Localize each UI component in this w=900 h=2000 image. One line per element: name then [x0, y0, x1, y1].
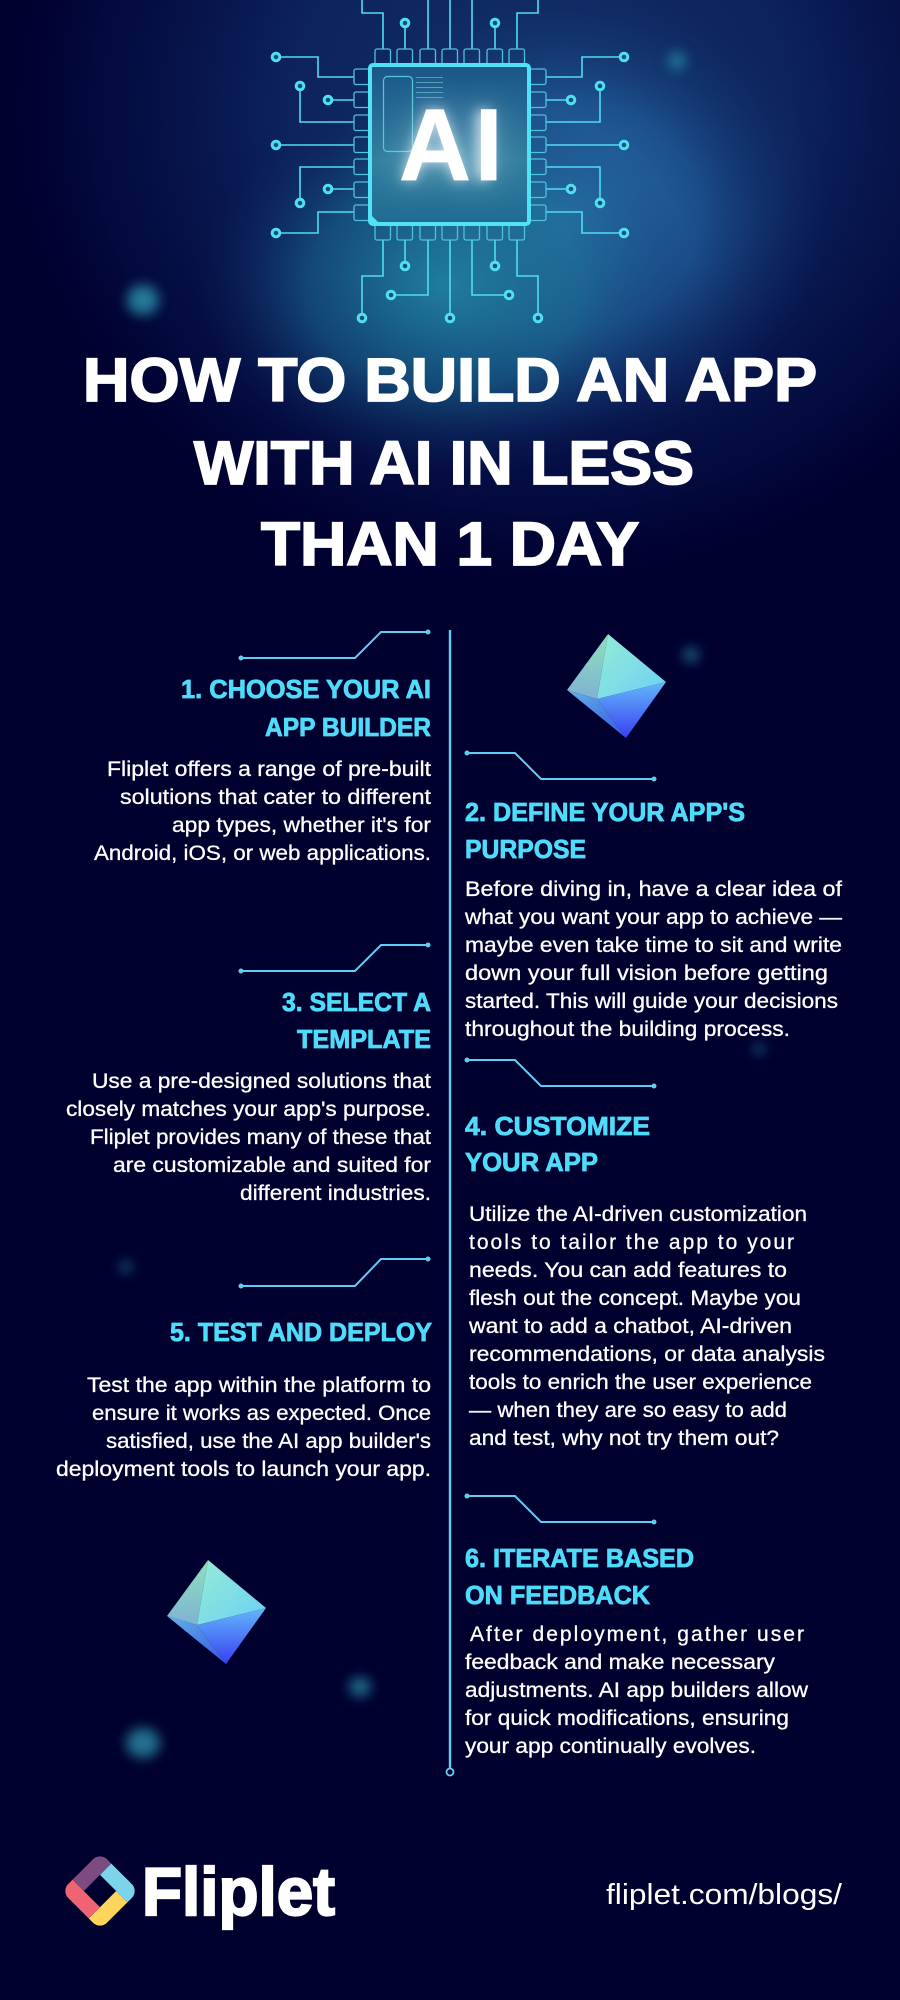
top navy wash [0, 0, 900, 640]
body text [465, 1623, 809, 1758]
connector [238, 1256, 430, 1288]
blurred light spots [120, 52, 765, 1758]
body text: tools to enrich the user experience [469, 1371, 812, 1394]
body text: After deployment, gather user [470, 1623, 804, 1646]
body text [94, 758, 431, 865]
title: WITH AI IN LESS [194, 429, 694, 497]
heading: 5. TEST AND DEPLOY [170, 1317, 432, 1347]
body text [56, 1374, 431, 1481]
body text: and test, why not try them out? [469, 1427, 779, 1450]
body text: ensure it works as expected. Once [92, 1402, 431, 1425]
body text: for quick modifications, ensuring [465, 1707, 789, 1730]
body text: down your full vision before getting [465, 962, 828, 985]
body text: — when they are so easy to add [469, 1399, 787, 1422]
step 4 [464, 1058, 825, 1450]
body text: Test the app within the platform to [87, 1374, 431, 1397]
central timeline [446, 630, 454, 1776]
body text: needs. You can add features to [469, 1259, 787, 1282]
heading [465, 1543, 694, 1610]
heading: ON FEEDBACK [465, 1580, 650, 1610]
connector [238, 942, 430, 974]
chip pins [354, 49, 546, 240]
circuit end rings [272, 19, 628, 322]
body text: different industries. [240, 1182, 431, 1205]
top blue glow [200, 0, 900, 500]
body text [66, 1070, 431, 1205]
step 6 [464, 1494, 809, 1758]
website link: fliplet.com/blogs/ [606, 1879, 843, 1911]
circuit traces [281, 0, 619, 313]
body text: want to add a chatbot, AI-driven [468, 1315, 792, 1338]
connector [238, 630, 430, 660]
body text: closely matches your app's purpose. [66, 1098, 431, 1121]
connector [464, 750, 656, 782]
body text: are customizable and suited for [113, 1154, 431, 1177]
heading: 4. CUSTOMIZE [465, 1111, 650, 1141]
Fliplet wordmark: Fliplet [142, 1854, 335, 1930]
heading [465, 797, 745, 864]
icon: Fliplet logo mark [67, 1858, 133, 1924]
chip corner notch [370, 214, 380, 224]
heading [282, 987, 431, 1054]
heading [465, 1111, 650, 1177]
step 5 [56, 1256, 432, 1481]
body text: Utilize the AI-driven customization [469, 1203, 807, 1226]
body text: tools to tailor the app to your [469, 1231, 794, 1254]
body text: throughout the building process. [465, 1018, 790, 1041]
heading: PURPOSE [465, 834, 586, 864]
icon: gem bottom left [167, 1560, 266, 1664]
icon: AI chip with circuit lines [272, 0, 628, 322]
body text: Android, iOS, or web applications. [94, 842, 431, 865]
heading: TEMPLATE [297, 1024, 431, 1054]
step 1 [94, 630, 431, 865]
AI wide halo: AI [399, 88, 497, 202]
body text: maybe even take time to sit and write [465, 934, 842, 957]
body text: flesh out the concept. Maybe you [469, 1287, 801, 1310]
chip document panel [384, 76, 443, 152]
chip body [370, 65, 529, 224]
body text: satisfied, use the AI app builder's [106, 1430, 431, 1453]
body text: adjustments. AI app builders allow [465, 1679, 809, 1702]
body text: started. This will guide your decisions [465, 990, 838, 1013]
body text: Use a pre-designed solutions that [92, 1070, 431, 1093]
body text: feedback and make necessary [465, 1651, 776, 1674]
body text: Fliplet offers a range of pre-built [107, 758, 431, 781]
heading: 3. SELECT A [282, 987, 431, 1017]
body text [468, 1203, 825, 1450]
heading: YOUR APP [465, 1147, 598, 1177]
icon: gem top right [567, 634, 666, 738]
top teal glow [150, 60, 750, 510]
heading: 2. DEFINE YOUR APP'S [465, 797, 745, 827]
AI near glow: AI [399, 88, 497, 202]
step 3 [66, 942, 431, 1205]
body text: solutions that cater to different [120, 786, 431, 809]
body text: recommendations, or data analysis [469, 1343, 825, 1366]
AI label: A [399, 88, 471, 202]
body text: Fliplet provides many of these that [90, 1126, 431, 1149]
body text: what you want your app to achieve — [464, 906, 842, 929]
title: THAN 1 DAY [261, 510, 639, 578]
body text: Before diving in, have a clear idea of [465, 878, 842, 901]
step 2 [464, 750, 842, 1041]
connector [464, 1494, 656, 1524]
title: HOW TO BUILD AN APP [83, 346, 817, 414]
body text: your app continually evolves. [465, 1735, 756, 1758]
body text [464, 878, 842, 1041]
heading: APP BUILDER [265, 712, 431, 742]
connector [464, 1058, 656, 1088]
body text: app types, whether it's for [172, 814, 431, 837]
heading: 1. CHOOSE YOUR AI [181, 674, 431, 704]
heading: 6. ITERATE BASED [465, 1543, 694, 1573]
AI label: I [474, 88, 503, 202]
heading [181, 674, 431, 742]
body text: deployment tools to launch your app. [56, 1458, 431, 1481]
title [83, 346, 817, 578]
